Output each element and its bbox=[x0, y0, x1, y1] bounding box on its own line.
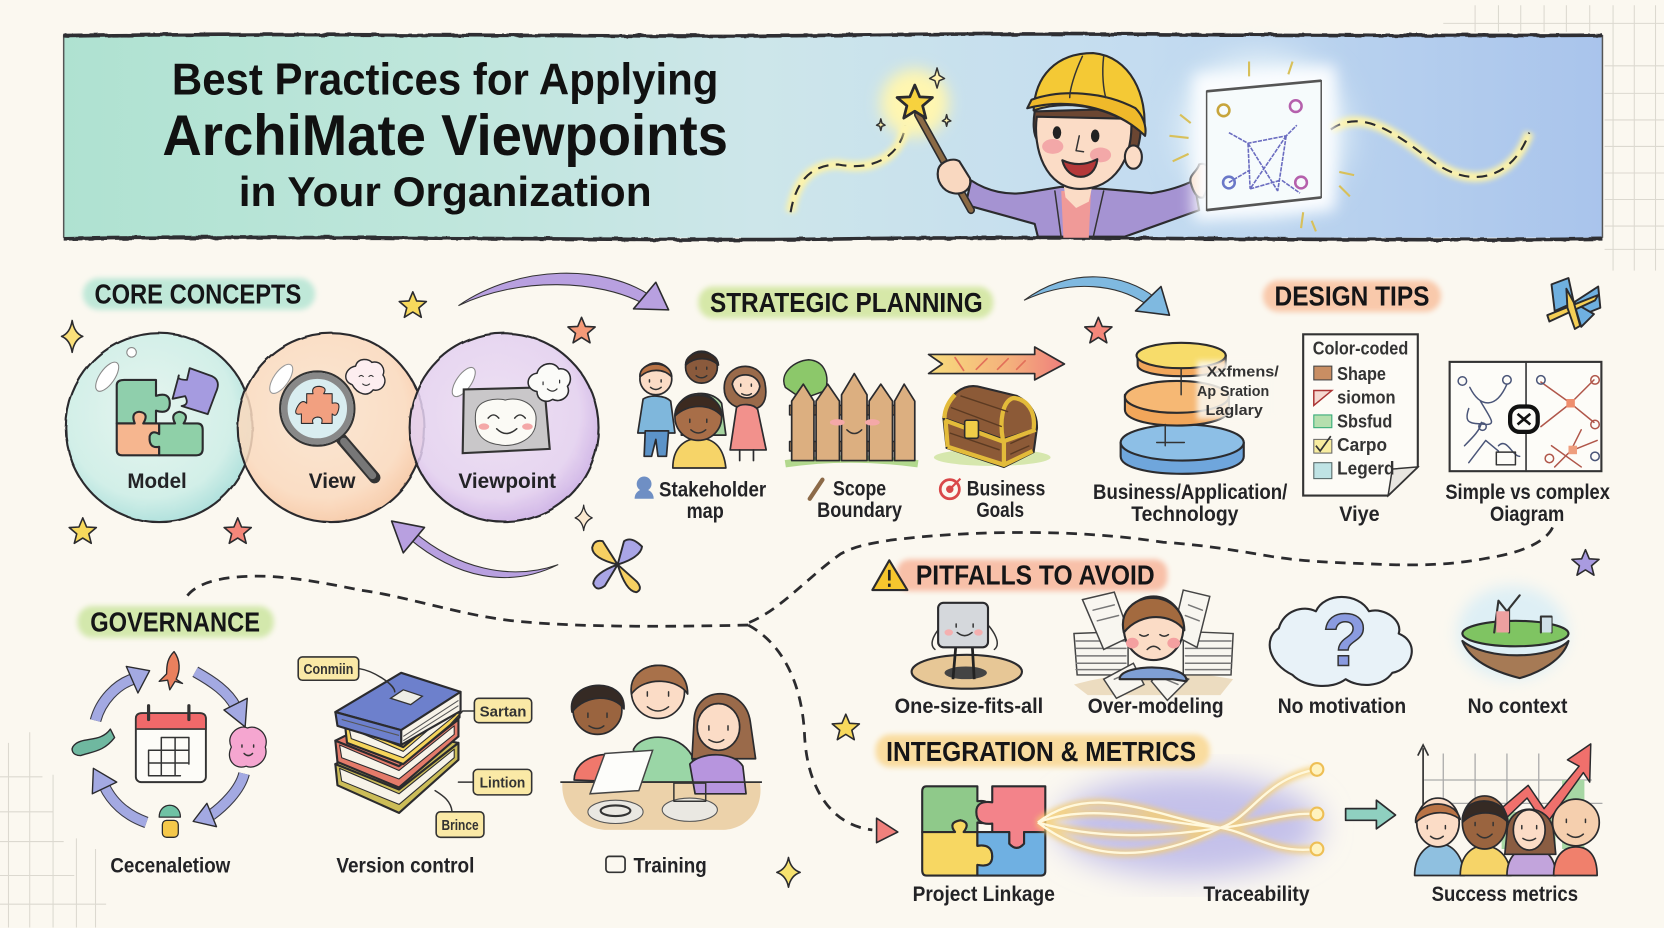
book: olive bbox=[335, 732, 458, 813]
arrow: bottom right bbox=[193, 774, 244, 827]
illustration: flag arrow bbox=[929, 347, 1064, 380]
loose papers bbox=[1082, 590, 1210, 700]
title: Best Practices for Applying bbox=[172, 55, 718, 104]
label: cecenaletiow: Cecenaletiow bbox=[110, 854, 231, 877]
person: blue boy bbox=[638, 396, 675, 433]
glowing network diagram sheet bbox=[1169, 62, 1354, 231]
chest lid bbox=[943, 386, 1037, 439]
title: ArchiMate Viewpoints bbox=[162, 104, 728, 168]
label: stakeholder map: map bbox=[687, 500, 724, 523]
book: yellow bbox=[345, 692, 460, 764]
label: stakeholder map: Stakeholder bbox=[659, 479, 766, 502]
icon: calendar bbox=[136, 706, 206, 782]
tag: sartan: Sartan bbox=[480, 704, 526, 720]
label: model: Model bbox=[127, 470, 187, 493]
illustration: training group bbox=[560, 665, 762, 830]
bubble: model bbox=[66, 333, 253, 522]
person: pink girl bbox=[724, 366, 766, 409]
icon: blue pinwheel bbox=[1547, 278, 1600, 329]
person: red bbox=[1554, 847, 1597, 876]
label: scope boundary bbox=[810, 478, 902, 522]
faces: stakeholder details bbox=[649, 367, 751, 433]
illustration: no context island bbox=[1457, 586, 1568, 679]
heading: design tips: DESIGN TIPS bbox=[1275, 281, 1429, 312]
arrow: top left bbox=[96, 666, 150, 721]
person: green man bbox=[681, 393, 726, 435]
label: stakeholder map bbox=[635, 476, 766, 523]
label: business goals bbox=[940, 478, 1045, 522]
shirt bbox=[1061, 191, 1091, 238]
diagram: simple vs complex bbox=[1450, 362, 1601, 471]
ear bbox=[1125, 145, 1142, 169]
illustration: stacked layers: Laglary bbox=[1206, 403, 1264, 419]
illustration: stacked layers bbox=[1121, 343, 1279, 474]
tag: conmiin bbox=[298, 657, 395, 692]
tag: lintion: Lintion bbox=[480, 775, 525, 791]
right hand bbox=[1190, 164, 1212, 198]
person: purple bbox=[1507, 847, 1556, 876]
icon: rocket bbox=[159, 652, 183, 690]
arrow: bubbles feedback bbox=[392, 521, 558, 578]
icon: viewpoint frame bbox=[463, 387, 550, 453]
legend card: color-coded: Shape bbox=[1337, 364, 1386, 384]
illustration: metric team bbox=[1415, 796, 1599, 876]
icon: magnifying glass bbox=[280, 371, 375, 478]
label: no context: No context bbox=[1468, 695, 1567, 718]
legend swatches bbox=[1314, 366, 1332, 380]
book: red bbox=[335, 709, 458, 787]
label: business application technology: Business/Application/ bbox=[1093, 481, 1287, 504]
mouth bbox=[1062, 159, 1097, 177]
banner bbox=[64, 34, 1602, 240]
simple side bbox=[1458, 376, 1520, 465]
legend card: color-coded bbox=[1303, 334, 1418, 496]
arrow: top right bbox=[195, 672, 247, 727]
arrowhead: coral bbox=[877, 818, 898, 843]
bars bbox=[1502, 780, 1584, 849]
illustration: wooden fence bbox=[784, 360, 918, 464]
label: project linkage: Project Linkage bbox=[913, 883, 1055, 906]
illustration: no motivation cloud bbox=[1270, 597, 1412, 686]
label: business application technology: Technology bbox=[1131, 503, 1239, 526]
label: business goals: Business bbox=[967, 478, 1045, 501]
hard hat bbox=[1034, 53, 1145, 134]
dashed path: upper route bbox=[748, 527, 1553, 623]
grid bbox=[1424, 753, 1602, 828]
chest body bbox=[943, 418, 1037, 467]
illustration: over-modeling bbox=[1074, 590, 1233, 700]
illustration: stacked layers: Xxfmens/ bbox=[1207, 365, 1279, 381]
label: success metrics: Success metrics bbox=[1432, 883, 1578, 906]
star: yellow mid bbox=[832, 714, 859, 740]
illustration: stakeholder group bbox=[638, 351, 766, 468]
arrow: teal bbox=[1346, 800, 1396, 829]
arrow: core concepts to strategic planning bbox=[458, 273, 669, 310]
sparkle: yellow bottom bbox=[777, 857, 800, 887]
neck bbox=[1063, 183, 1093, 208]
person: blue bbox=[1415, 844, 1464, 876]
label: scope boundary: Boundary bbox=[817, 499, 902, 522]
character: architect with hard hat bbox=[966, 53, 1212, 238]
kid: green middle bbox=[631, 665, 696, 782]
sparkle: cream bbox=[575, 505, 592, 531]
legend text: Color-coded bbox=[1313, 338, 1408, 358]
trend arrow bbox=[1491, 744, 1591, 826]
label: viewpoint: Viewpoint bbox=[458, 470, 556, 493]
label: training: Training bbox=[634, 854, 707, 877]
hand holding wand bbox=[938, 160, 970, 194]
hair back bbox=[1034, 108, 1141, 149]
icon: puzzle pieces bbox=[117, 380, 203, 455]
legend card: color-coded: Sbsfud bbox=[1337, 412, 1392, 432]
complex side bbox=[1537, 376, 1599, 467]
label: business goals: Goals bbox=[976, 499, 1024, 522]
star: coral centre bbox=[1085, 317, 1112, 343]
legend card: color-coded: Carpo bbox=[1337, 435, 1387, 455]
icon: warning triangle bbox=[872, 560, 907, 590]
label: business application technology bbox=[1093, 481, 1287, 526]
star: yellow top bbox=[399, 292, 426, 317]
label: scope boundary: Scope bbox=[833, 478, 886, 501]
label: no motivation: No motivation bbox=[1278, 695, 1406, 718]
tags: book callouts bbox=[298, 657, 532, 837]
star: yellow bottom bbox=[69, 518, 96, 543]
tag: sartan bbox=[451, 698, 532, 724]
label: one-size-fits-all: One-size-fits-all bbox=[895, 695, 1043, 718]
axes bbox=[1422, 748, 1424, 817]
label: viye: Viye bbox=[1339, 503, 1380, 526]
tag: conmiin: Conmiin bbox=[304, 662, 353, 678]
table bbox=[562, 782, 761, 830]
illustration: stacked layers: Ap Sration bbox=[1197, 384, 1269, 400]
decorative grid: top right bbox=[1443, 5, 1664, 271]
layer: technology bbox=[1121, 443, 1244, 474]
magic wand with star bbox=[877, 68, 971, 210]
banner dashed trail left bbox=[791, 125, 905, 212]
book stack bbox=[335, 673, 461, 813]
right wash: banner cloud bbox=[1178, 53, 1348, 212]
heading: strategic planning: STRATEGIC PLANNING bbox=[710, 287, 983, 318]
legend card: color-coded: siomon bbox=[1337, 387, 1396, 407]
layer: business bbox=[1138, 356, 1226, 376]
eyes bbox=[1053, 126, 1061, 139]
icon: smile cloud bbox=[528, 364, 570, 401]
bubble: view bbox=[238, 333, 424, 522]
icon: purple puzzle piece bbox=[173, 368, 218, 414]
sparkle: yellow left bbox=[62, 320, 83, 352]
legend card: color-coded: Legerd bbox=[1337, 458, 1394, 478]
book: blue bbox=[335, 673, 461, 745]
tag: brince: Brince bbox=[441, 818, 479, 834]
arrow: strategic planning to design tips bbox=[1024, 277, 1169, 315]
illustration: one-size-fits-all bbox=[912, 603, 1022, 689]
dashed path: integration route bbox=[748, 625, 872, 830]
illustration: traceability threads bbox=[1038, 763, 1323, 855]
tag: lintion bbox=[458, 769, 532, 795]
icon: person bbox=[635, 476, 654, 499]
heading: core concepts: CORE CONCEPTS bbox=[94, 279, 301, 310]
title bbox=[162, 55, 728, 215]
kid: purple girl bbox=[690, 694, 756, 794]
title: in Your Organization bbox=[239, 169, 652, 215]
paper stacks bbox=[1074, 631, 1233, 675]
illustration: treasure chest bbox=[934, 386, 1051, 467]
decorative grid: bottom left bbox=[0, 732, 106, 928]
banner dashed trail right bbox=[1331, 121, 1529, 177]
illustration: no motivation cloud: ? bbox=[1322, 598, 1368, 681]
layer: application bbox=[1125, 395, 1229, 426]
icon: target bbox=[940, 479, 960, 499]
icon: pink fluff bbox=[229, 727, 266, 767]
layer labels patch bbox=[1197, 361, 1273, 419]
icon: green leaf bbox=[72, 729, 115, 756]
star: orange top bbox=[568, 317, 595, 343]
label: training bbox=[606, 854, 707, 877]
governance cycle bbox=[72, 652, 266, 837]
bubble: viewpoint bbox=[410, 333, 599, 522]
label: traceability: Traceability bbox=[1203, 883, 1310, 906]
heading: pitfalls to avoid: PITFALLS TO AVOID bbox=[916, 560, 1155, 591]
label: simple vs complex: Simple vs complex bbox=[1445, 481, 1610, 504]
label: over-modeling: Over-modeling bbox=[1088, 695, 1224, 718]
chart: success metrics bbox=[1418, 744, 1602, 849]
label: view: View bbox=[309, 470, 356, 493]
icon: thought cloud bbox=[346, 359, 385, 394]
traceability glow background bbox=[1056, 775, 1321, 877]
person: yellow boy bbox=[673, 438, 726, 468]
star: coral bottom bbox=[224, 518, 251, 543]
jacket bbox=[966, 180, 1199, 237]
plates bbox=[588, 800, 643, 824]
dashed path: governance route bbox=[187, 576, 748, 626]
illustration: project linkage puzzle bbox=[922, 786, 1045, 876]
centre scribble bbox=[1510, 406, 1538, 432]
heading: integration and metrics: INTEGRATION & METRICS bbox=[886, 736, 1196, 767]
icon: card bbox=[606, 856, 625, 872]
label: simple vs complex bbox=[1445, 481, 1610, 526]
arrow: bottom left bbox=[92, 768, 146, 822]
icon: pin bbox=[810, 480, 822, 499]
cheeks bbox=[1042, 139, 1063, 154]
face bbox=[1036, 117, 1131, 189]
tag: brince bbox=[435, 791, 484, 837]
icon: bulb bbox=[159, 805, 180, 837]
icon: yellow and blue pinwheel bbox=[592, 539, 642, 592]
person: yellow bbox=[1460, 846, 1511, 876]
label: version control: Version control bbox=[336, 854, 474, 877]
star: purple right bbox=[1572, 550, 1599, 575]
kid: red left bbox=[572, 685, 626, 782]
paper bbox=[590, 750, 653, 794]
heading: governance: GOVERNANCE bbox=[90, 606, 260, 637]
label: simple vs complex: Oiagram bbox=[1490, 503, 1564, 526]
